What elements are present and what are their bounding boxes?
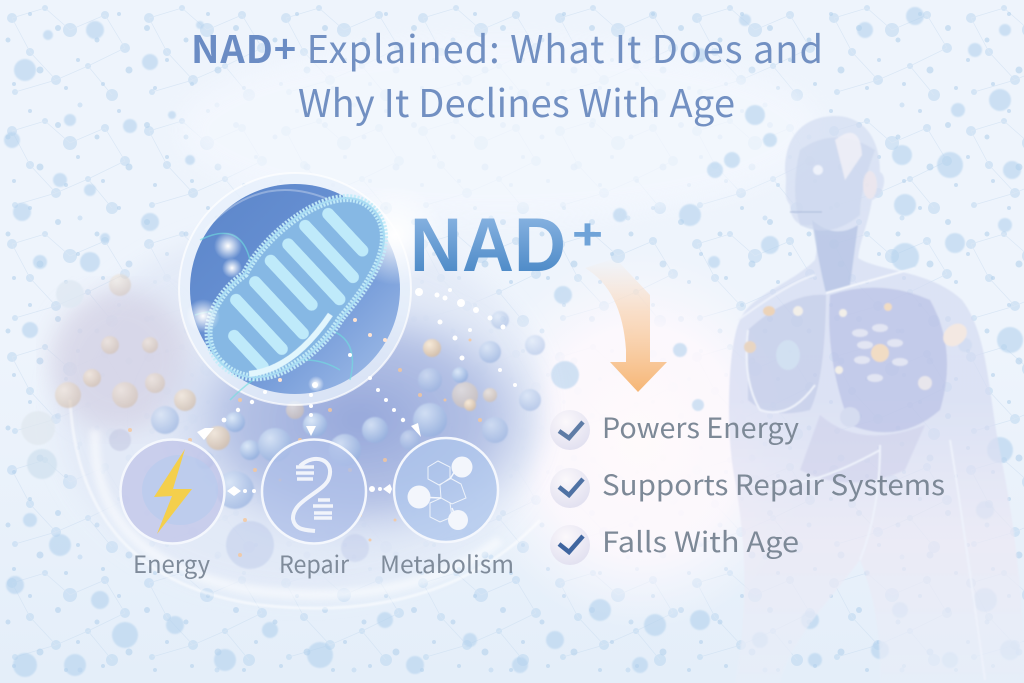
item: Supports Repair Systems: Supports Repair Systems — [602, 464, 945, 504]
mitochondrion sphere — [179, 173, 445, 405]
item: Falls With Age: Falls With Age — [602, 521, 799, 561]
NAD+ heading: + — [572, 210, 603, 259]
arrow: orange decline — [585, 258, 667, 392]
label: Metabolism: Metabolism — [380, 545, 514, 580]
check icon 3 — [550, 525, 590, 565]
title: Why It Declines With Age — [298, 73, 735, 128]
NAD+ heading: NAD — [410, 203, 566, 288]
icon: energy bolt — [120, 440, 224, 544]
check icon 2 — [550, 468, 590, 508]
item: Powers Energy: Powers Energy — [602, 407, 799, 447]
icon: repair DNA — [262, 440, 366, 544]
title — [191, 19, 823, 128]
check list — [550, 407, 945, 565]
icon: metabolism molecule — [394, 438, 498, 542]
label: Energy: Energy — [133, 545, 210, 580]
dotted connector trails — [197, 288, 517, 496]
amber glitter specks — [128, 338, 482, 557]
mitochondrion body — [182, 174, 416, 403]
label: Repair: Repair — [279, 545, 350, 580]
cell cluster backdrop — [21, 225, 545, 608]
check icon 1 — [550, 410, 590, 450]
title: NAD+ Explained: What It Does and — [191, 19, 823, 74]
human figure — [729, 116, 1024, 683]
